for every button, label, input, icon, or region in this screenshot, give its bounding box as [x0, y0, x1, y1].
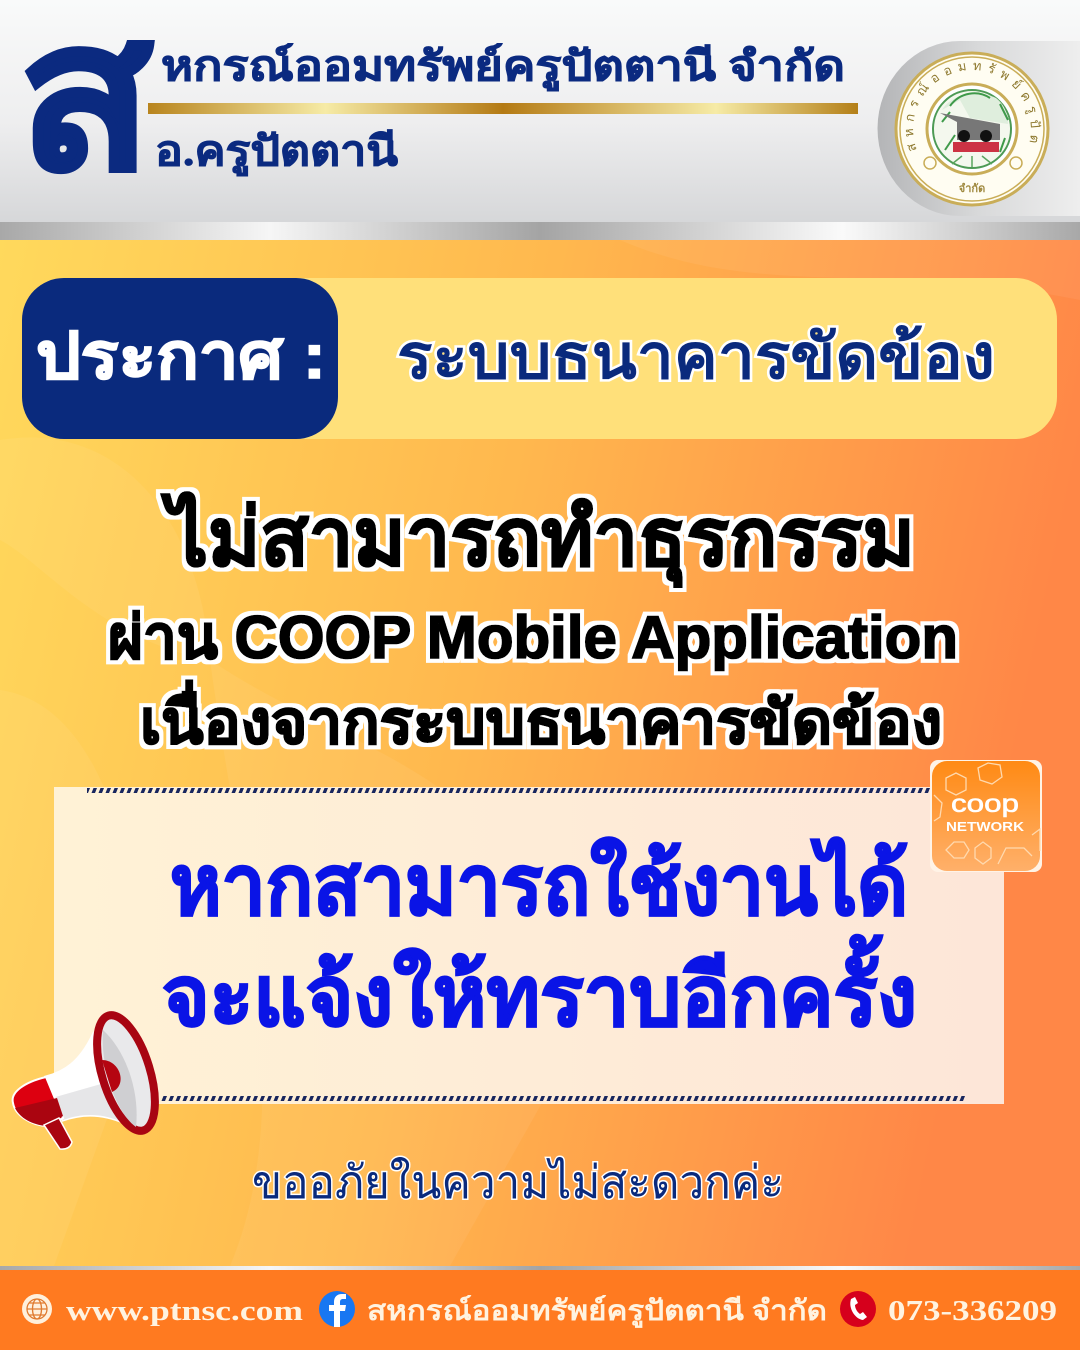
silver strip — [0, 222, 1080, 240]
district name: อ.ครูปัตตานี — [155, 128, 398, 177]
announcement bar — [22, 278, 1057, 439]
icon: globe — [22, 1294, 52, 1324]
announcement label: ประกาศ : — [36, 320, 326, 392]
logo seal backing — [878, 41, 1080, 216]
notice panel — [54, 787, 1004, 1104]
organisation name: หกรณ์ออมทรัพย์ครูปัตตานี จำกัด — [161, 43, 845, 92]
icon: COOP network app — [930, 760, 1042, 872]
icon: facebook — [319, 1291, 355, 1327]
announcement topic: ระบบธนาคารขัดข้อง — [397, 323, 995, 392]
notice line 1: หากสามารถใช้งานได้ — [170, 837, 908, 932]
phone number: 073-336209 — [888, 1296, 1057, 1327]
facebook name: สหกรณ์ออมทรัพย์ครูปัตตานี จำกัด — [367, 1295, 827, 1328]
icon: cooperative seal — [894, 52, 1050, 206]
notice line 2: จะแจ้งให้ทราบอีกครั้ง — [162, 934, 917, 1043]
icon: megaphone — [13, 1009, 166, 1149]
icon: phone — [840, 1291, 876, 1327]
icon: COOP network app: coop — [951, 790, 1019, 818]
line 2: ผ่าน COOP Mobile Application — [108, 604, 958, 671]
apology line: ขออภัยในความไม่สะดวกค่ะ — [252, 1156, 784, 1208]
line 1: ไม่สามารถทำธุรกรรม — [160, 491, 915, 588]
orange background — [0, 240, 1080, 1266]
website: www.ptnsc.com — [66, 1296, 303, 1327]
icon: cooperative seal: จำกัด — [959, 182, 985, 195]
header band — [0, 0, 1080, 222]
announcement tag — [22, 278, 338, 439]
footer band — [0, 1270, 1080, 1350]
icon: COOP network app: NETWORK — [946, 819, 1025, 834]
silver footer strip — [0, 1266, 1080, 1270]
gold divider — [148, 103, 858, 114]
main message — [108, 491, 958, 756]
line 3: เนื่องจากระบบธนาคารขัดข้อง — [140, 680, 942, 756]
